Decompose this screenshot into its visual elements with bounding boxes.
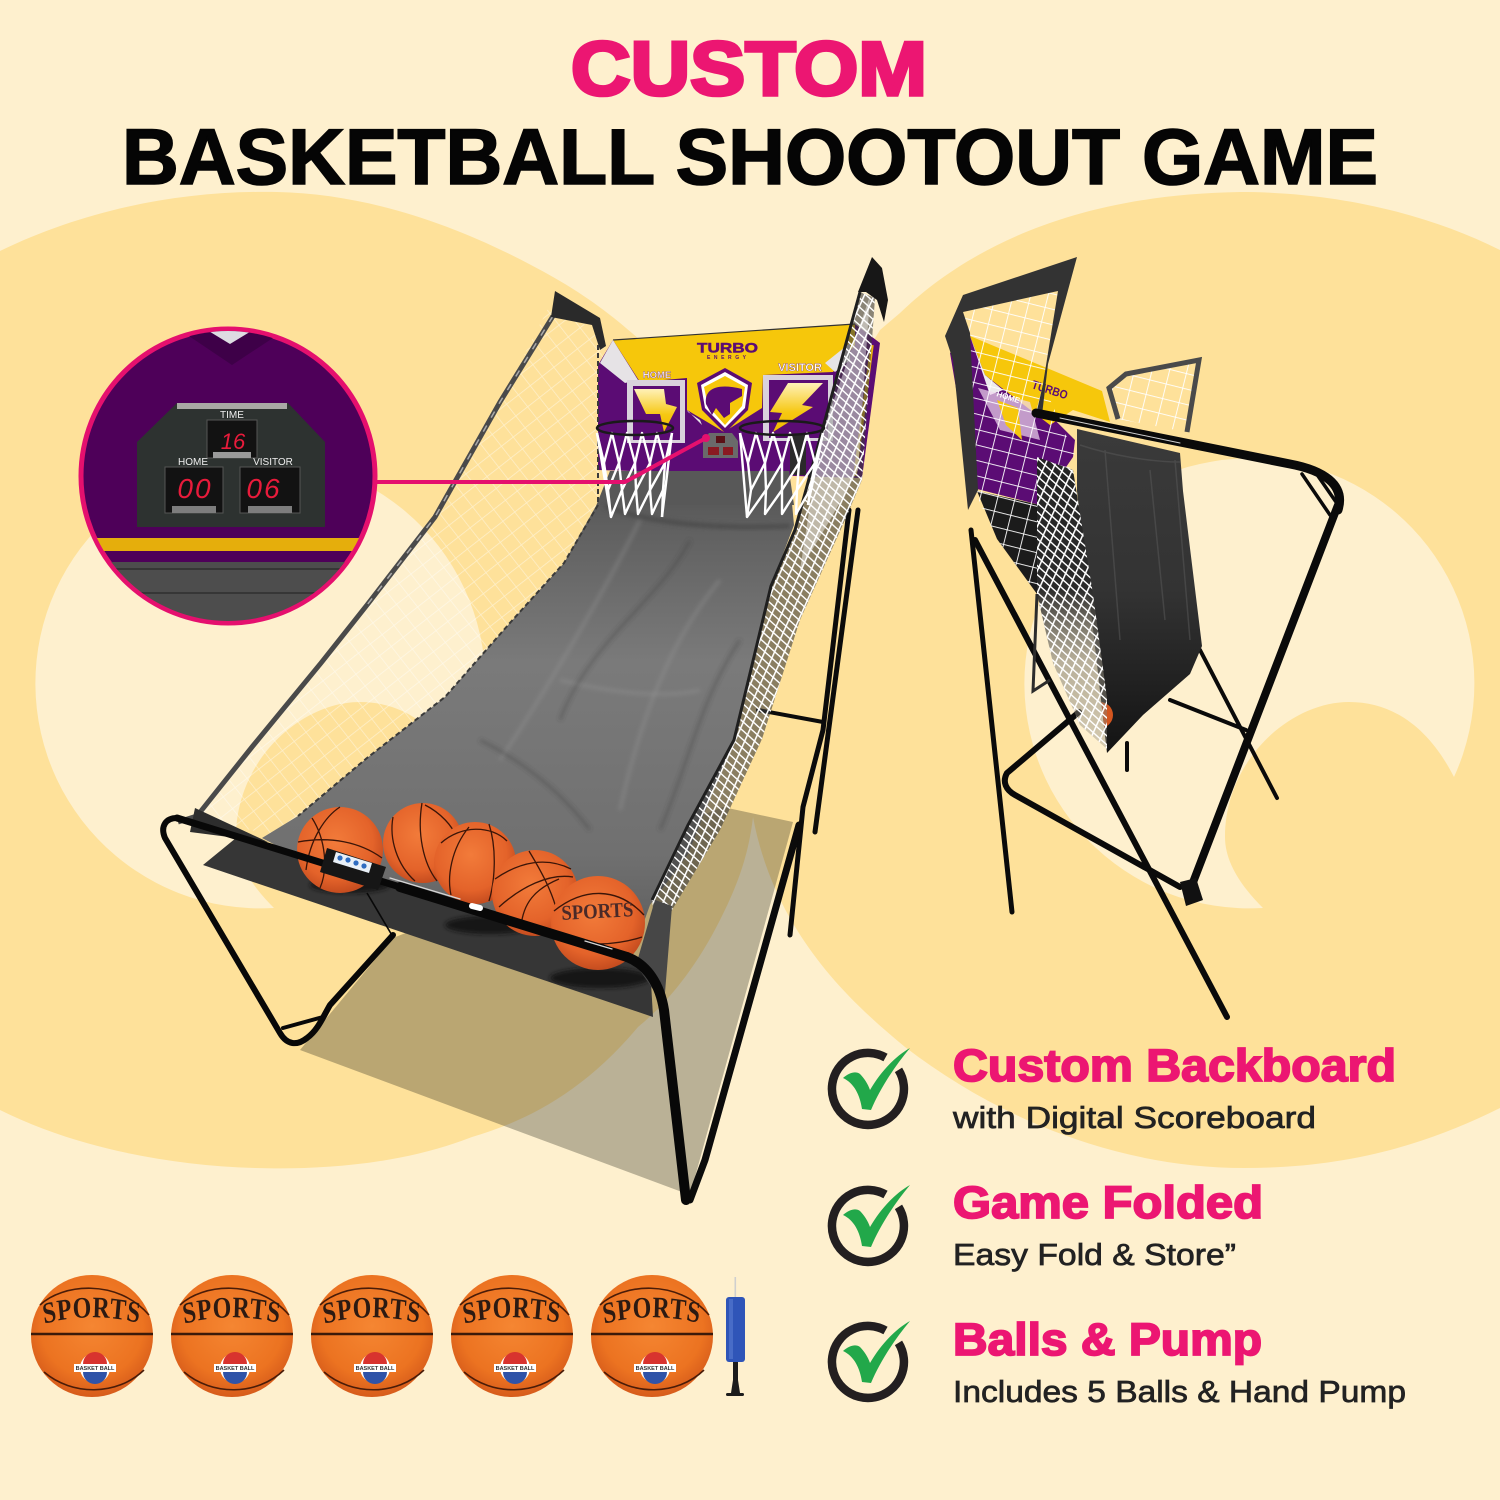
logo text: ENERGY: [707, 355, 747, 361]
scoreboard housing: VISITOR: [253, 457, 293, 468]
ball 4: [451, 1275, 573, 1397]
front-left frame and bar: [163, 818, 686, 1200]
balls on tray: [297, 803, 645, 970]
title: [122, 27, 1378, 201]
icon: check 3: [832, 1321, 910, 1398]
feature: custom backboard: Custom Backboard: [953, 1040, 1396, 1091]
callout: scoreboard zoom: [80, 329, 380, 632]
feature: game folded: Easy Fold & Store”: [953, 1237, 1236, 1272]
feature: balls and pump: Includes 5 Balls & Hand Pump: [953, 1374, 1406, 1409]
scoreboard housing: 06: [246, 473, 282, 504]
scoreboard housing: HOME: [178, 457, 208, 468]
ball 4: BASKET BALL: [496, 1366, 535, 1372]
small rear net: [1109, 360, 1199, 432]
folded white net: [1033, 457, 1107, 749]
ball 3: BASKET BALL: [356, 1366, 395, 1372]
left net border strip: [178, 291, 606, 822]
ball 5: [591, 1275, 713, 1397]
right hoop: [740, 421, 824, 517]
ball 1: [31, 1275, 153, 1397]
ball 2: SPORTS: [183, 1298, 280, 1323]
shield logo: [697, 368, 752, 433]
balls on tray: SPORTS: [561, 897, 634, 925]
ball 4: SPORTS: [463, 1298, 560, 1323]
folded top fabric frame: [945, 257, 1077, 510]
home panel: HOME: [643, 370, 671, 381]
feature: custom backboard: [832, 1040, 1396, 1135]
scoreboard housing: 00: [177, 473, 213, 504]
visitor panel: VISITOR: [778, 362, 822, 374]
scoreboard housing: 16: [221, 429, 246, 454]
home panel: [627, 370, 685, 443]
visitor panel: [763, 362, 833, 441]
feature: custom backboard: with Digital Scoreboard: [952, 1100, 1316, 1135]
left hoop: [597, 421, 673, 517]
timer control box: [320, 848, 386, 890]
title: BASKETBALL SHOOTOUT GAME: [122, 112, 1378, 201]
ball tray fabric: [190, 808, 653, 1017]
scoreboard housing: [137, 403, 325, 527]
ball 3: [311, 1275, 433, 1397]
folded backboard: [950, 336, 1110, 594]
ball 2: BASKET BALL: [216, 1366, 255, 1372]
logo text: TURBO: [697, 340, 758, 356]
left faint net: [197, 295, 605, 835]
ball 2: [171, 1275, 293, 1397]
feature: balls and pump: Balls & Pump: [953, 1314, 1262, 1365]
ball 5: BASKET BALL: [636, 1366, 675, 1372]
ball 1: BASKET BALL: [76, 1366, 115, 1372]
icon: hand pump: [726, 1277, 745, 1396]
scoreboard housing: TIME: [220, 410, 244, 421]
mini scoreboard: [703, 433, 738, 458]
game: open front view: [163, 257, 888, 1200]
folded net over backboard: [963, 291, 1075, 594]
feature: game folded: Game Folded: [953, 1177, 1263, 1228]
corner net skirt: [636, 900, 672, 1005]
icon: check 1: [832, 1048, 910, 1125]
folded backboard: TURBO: [1030, 378, 1070, 402]
ball storage bag: [1077, 429, 1202, 753]
icon: check 2: [832, 1185, 910, 1262]
folded top bar: [1036, 413, 1340, 510]
folded legs: [971, 474, 1338, 1017]
folded backboard: HOME: [995, 389, 1022, 406]
backboard: [598, 324, 880, 478]
logo text: [697, 340, 758, 361]
game: folded side view: [945, 257, 1340, 1017]
title: CUSTOM: [571, 27, 927, 112]
feature: game folded: [832, 1177, 1263, 1272]
right white net: [652, 257, 888, 945]
feature: balls and pump: [832, 1314, 1406, 1409]
mat: [262, 471, 794, 955]
floor shadow of game: [300, 807, 793, 1195]
ball 3: SPORTS: [323, 1298, 420, 1323]
callout leader line: [376, 434, 710, 482]
rear legs: [690, 510, 858, 1200]
ball 5: SPORTS: [603, 1298, 700, 1323]
ball 1: SPORTS: [43, 1298, 140, 1323]
